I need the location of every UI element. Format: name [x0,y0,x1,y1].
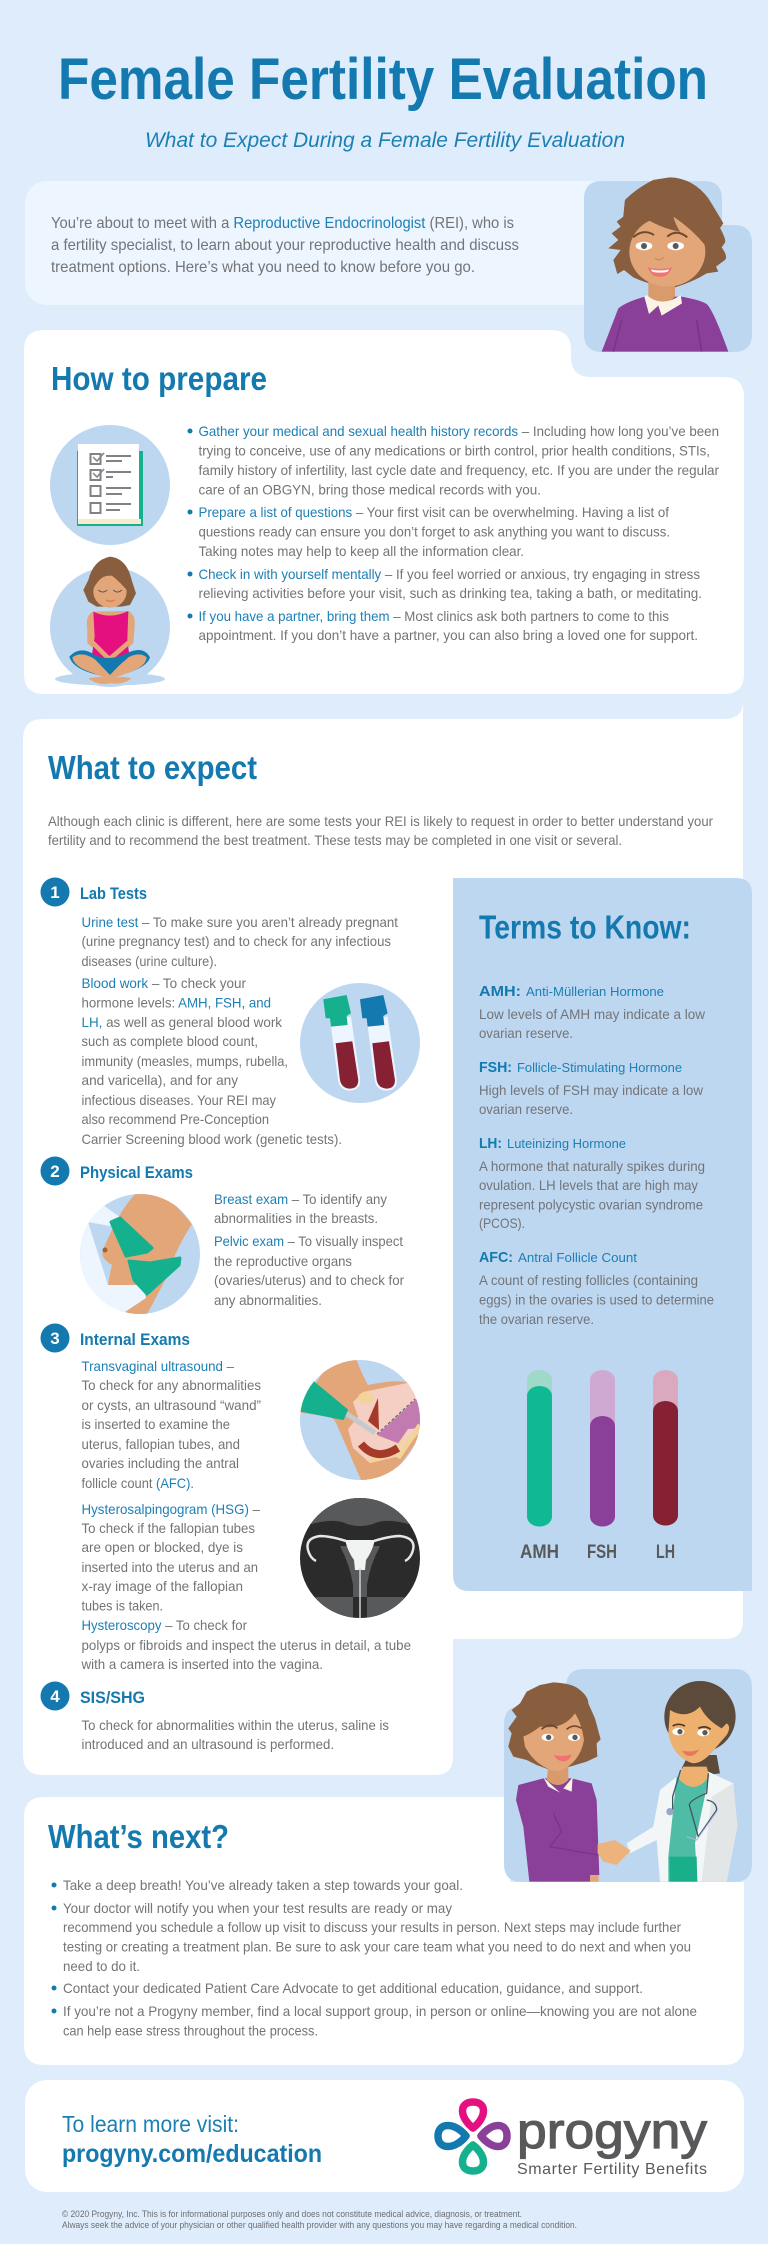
text: term definitions: represent polycystic ovarian syndrome [479,1198,703,1212]
text: learn more link: progyny.com/education [62,2140,322,2168]
illustration: patient and doctor handshake [508,1681,737,1882]
panel: introduction [25,181,625,305]
section 3: internal exams: x-ray image of the fallopian [82,1579,243,1594]
section 4: SIS/SHG: introduced and an ultrasound is performed. [82,1737,334,1752]
panel: introduction: You’re about to meet with a Reproductive Endocrinologist (REI), who is [51,215,514,232]
section 4: SIS/SHG: To check for abnormalities within the uterus, saline is [82,1718,389,1733]
illustration: woman portrait [602,177,728,352]
list: how to prepare bullets: relieving activities before your visit, such as drinking tea, taking a bath, or meditating. [198,586,702,601]
logo: progyny: Smarter Fertility Benefits [517,2161,707,2178]
text: term definitions: Low levels of AMH may indicate a low [479,1007,705,1022]
list: how to prepare bullets: Taking notes may help to keep all the information clear. [198,544,524,559]
section 1: lab tests: (urine pregnancy test) and to check for any infectious [82,934,391,949]
section 2: physical exams: 2 [50,1162,60,1181]
heading: what to expect: What to expect [48,749,257,786]
section 3: internal exams: Hysterosalpingogram (HSG) – [82,1502,260,1517]
logo: progyny [438,2102,707,2178]
section 2: physical exams: Breast exam – To identify any [214,1192,387,1207]
section 2: physical exams: Pelvic exam – To visually inspect [214,1234,403,1249]
section 3: internal exams: inserted into the uterus and an [82,1560,258,1575]
text: what to expect intro: Although each clinic is different, here are some tests your REI is likely to request in order to better understand your [48,814,713,829]
section 3: internal exams: are open or blocked, dye is [82,1540,243,1555]
section 1: lab tests: Lab Tests [80,884,147,903]
panel: what to expect background [23,702,743,1775]
section 2: physical exams: (ovaries/uterus) and to check for [214,1273,404,1288]
illustration: transvaginal ultrasound [296,1358,425,1482]
bar chart: hormone levels [520,1370,678,1563]
text: term definitions: AFC: [479,1249,513,1266]
text: term definitions: High levels of FSH may indicate a low [479,1083,703,1098]
section 2: physical exams: Physical Exams [80,1163,193,1182]
text: term definitions: FSH: [479,1059,512,1076]
section 1: lab tests: 1 [50,883,60,902]
panel: introduction: treatment options. Here’s what you need to know before you go. [51,259,475,276]
bar chart: hormone levels: FSH [587,1542,617,1563]
list: how to prepare bullets: Check in with yourself mentally – If you feel worried or anxious, try engaging in stress [198,567,700,582]
text: term definitions: ovarian reserve. [479,1102,573,1117]
list: what's next bullets: testing or creating a treatment plan. Be sure to ask your care team what you need to do next and when you [63,1940,691,1954]
section 3: internal exams: To check if the fallopian tubes [82,1521,255,1536]
list: what's next bullets: can help ease stress throughout the process. [63,2024,318,2038]
panel: introduction: a fertility specialist, to learn about your reproductive health and discuss [51,237,519,254]
list: what's next bullets: If you’re not a Progyny member, find a local support group, in person or online—knowing you are not alone [63,2004,697,2019]
panel: learn more footer [25,2080,744,2192]
text: copyright disclaimer: © 2020 Progyny, Inc. This is for informational purposes only and does not constitute medical advice, diagnosis, or treatment. [62,2209,522,2219]
text: term definitions: Follicle-Stimulating Hormone [517,1060,682,1075]
list: what's next bullets: Contact your dedicated Patient Care Advocate to get additional education, guidance, and support. [63,1981,643,1996]
list: what's next bullets [52,1878,697,2038]
list: how to prepare bullets: care of an OBGYN, bring those medical records with you. [198,482,541,498]
text: term definitions: eggs) in the ovaries is used to determine [479,1292,714,1308]
panel: terms to know [453,878,752,1591]
section 1: lab tests: and varicella), and for any [82,1073,238,1088]
section 1: lab tests: infectious diseases. Your REI may [82,1093,276,1108]
section 1: lab tests: Carrier Screening blood work (genetic tests). [82,1132,342,1147]
text: term definitions: ovarian reserve. [479,1026,573,1041]
section 3: internal exams: Transvaginal ultrasound – [82,1359,234,1374]
illustration: breast exam [78,1192,200,1320]
icon: blood test tubes [300,983,420,1103]
section 3: internal exams: uterus, fallopian tubes, and [82,1437,240,1452]
section 1: lab tests: immunity (measles, mumps, rubella, [82,1054,288,1069]
list: how to prepare bullets: If you have a partner, bring them – Most clinics ask both partners to come to this [198,609,669,624]
section 3: internal exams: 3 [50,1329,60,1348]
list: what's next bullets: recommend you schedule a follow up visit to discuss your results in person. Next steps may include further [63,1920,681,1935]
section 1: lab tests [40,878,398,1147]
heading: terms to know: Terms to Know: [479,908,691,946]
illustration background: handshake [504,1669,752,1882]
section 3: internal exams: polyps or fibroids and inspect the uterus in detail, a tube [82,1638,411,1653]
section 2: physical exams: abnormalities in the breasts. [214,1211,378,1226]
section 4: SIS/SHG: 4 [50,1687,60,1706]
heading: what's next: What’s next? [48,1818,229,1855]
text: term definitions: LH: [479,1135,502,1152]
section 1: lab tests: diseases (urine culture). [82,954,217,969]
text: term definitions: ovulation. LH levels that are high may [479,1178,698,1193]
list: how to prepare bullets [188,424,719,643]
bar chart: hormone levels: AMH [520,1542,559,1563]
section 2: physical exams [40,1156,404,1308]
panel: how to prepare background [24,330,744,694]
text: copyright disclaimer: Always seek the advice of your physician or other qualified health provider with any questions you may have regarding a medical condition. [62,2220,577,2230]
list: how to prepare bullets: appointment. If you don’t have a partner, you can also bring a loved one for support. [198,628,698,643]
text: term definitions: (PCOS). [479,1216,525,1231]
text: learn more link: To learn more visit: [62,2111,239,2137]
section 3: internal exams: with a camera is inserted into the vagina. [81,1657,323,1672]
section 3: internal exams: or cysts, an ultrasound “wand” [82,1398,261,1413]
section 1: lab tests: Blood work – To check your [82,976,246,991]
logo: progyny: progyny [517,2103,707,2159]
section 4: SIS/SHG [40,1682,389,1752]
list: what's next bullets: Your doctor will notify you when your test results are ready or may [63,1901,452,1916]
text: learn more link [62,2111,322,2168]
subtitle: What to Expect During a Female Fertility Evaluation [145,129,625,152]
text: term definitions: AMH: [479,983,521,1000]
section 2: physical exams: any abnormalities. [214,1293,322,1308]
icon: checklist [50,425,170,545]
text: copyright disclaimer [62,2209,577,2230]
text: term definitions: Anti-Müllerian Hormone [526,984,664,999]
text: term definitions: A count of resting follicles (containing [479,1273,698,1288]
text: term definitions: A hormone that naturally spikes during [479,1159,705,1174]
section 3: internal exams: is inserted to examine the [82,1417,230,1432]
section 1: lab tests: Urine test – To make sure you aren’t already pregnant [82,915,398,930]
list: how to prepare bullets: Gather your medical and sexual health history records – Including how long you’ve been [198,424,719,439]
list: what's next bullets: Take a deep breath! You’ve already taken a step towards your goal. [63,1878,463,1893]
illustration: HSG x-ray [300,1498,420,1620]
bar chart: hormone levels: LH [656,1542,675,1563]
list: how to prepare bullets: Prepare a list of questions – Your first visit can be overwhelming. Having a list of [198,505,669,520]
section 1: lab tests: such as complete blood count, [82,1034,258,1049]
heading: how to prepare: How to prepare [51,360,267,397]
text: what to expect intro [48,814,713,848]
text: term definitions: Antral Follicle Count [518,1250,637,1265]
section 3: internal exams: To check for any abnormalities [82,1378,261,1393]
panel: what's next background [24,1797,744,2065]
section 3: internal exams: Hysteroscopy – To check for [82,1618,247,1633]
text: term definitions: the ovarian reserve. [479,1312,594,1327]
section 1: lab tests: hormone levels: AMH, FSH, and [82,996,271,1010]
illustration: meditating woman [50,557,170,687]
list: how to prepare bullets: trying to conceive, use of any medications or birth control, prior health conditions, STIs, [198,444,710,458]
icon: portrait background [584,181,752,352]
section 3: internal exams: tubes is taken. [82,1598,163,1614]
section 1: lab tests: also recommend Pre-Conception [82,1112,269,1127]
section 1: lab tests: LH, as well as general blood work [82,1015,282,1030]
text: term definitions [479,983,714,1327]
list: how to prepare bullets: family history of infertility, last cycle date and frequency, etc. If you are under the regular [198,463,719,478]
text: term definitions: Luteinizing Hormone [507,1136,626,1151]
section 3: internal exams [40,1324,411,1672]
list: how to prepare bullets: questions ready can ensure you don’t forget to ask anything you want to discuss. [198,524,670,540]
section 2: physical exams: the reproductive organs [214,1254,352,1269]
section 3: internal exams: ovaries including the antral [82,1456,239,1471]
section 3: internal exams: follicle count (AFC). [82,1476,194,1491]
section 4: SIS/SHG: SIS/SHG [80,1688,145,1707]
list: what's next bullets: need to do it. [63,1959,140,1974]
text: what to expect intro: fertility and to recommend the best treatment. These tests may be completed in one visit or several. [48,833,622,848]
section 3: internal exams: Internal Exams [80,1330,190,1349]
